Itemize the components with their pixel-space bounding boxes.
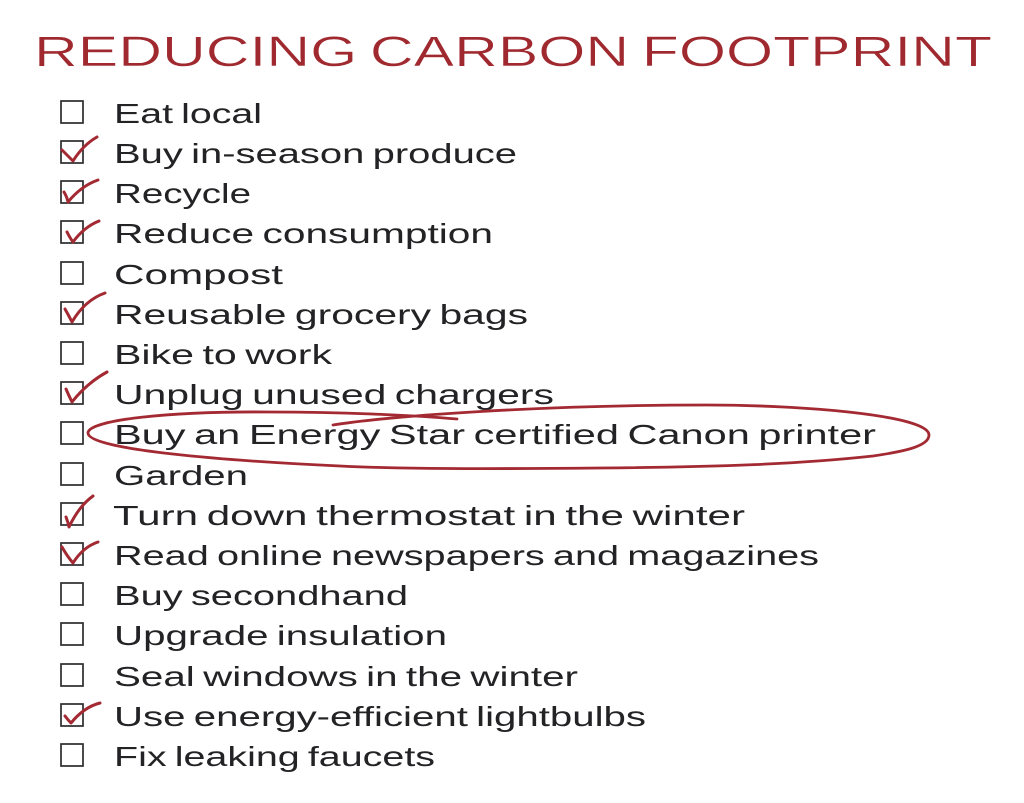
item: Reduce consumption	[61, 218, 493, 249]
item: Eat local	[61, 98, 262, 129]
item: Compost: Compost	[114, 259, 283, 290]
item: Compost	[61, 259, 283, 290]
item: Buy in-season produce: Buy in-season produce	[114, 138, 517, 169]
item: Bike to work: Bike to work	[114, 339, 333, 370]
item: Buy secondhand: Buy secondhand	[114, 580, 408, 611]
title: REDUCING CARBON FOOTPRINT	[34, 28, 992, 76]
item: Reduce consumption: Reduce consumption	[114, 218, 493, 249]
item: Turn down thermostat in the winter: Turn down thermostat in the winter	[113, 500, 745, 531]
item: Read online newspapers and magazines	[61, 540, 819, 571]
item: Turn down thermostat in the winter	[61, 496, 745, 531]
item: Seal windows in the winter	[61, 661, 578, 692]
item: Unplug unused chargers	[61, 372, 554, 410]
item: Fix leaking faucets: Fix leaking faucets	[114, 741, 435, 772]
item: Buy in-season produce	[61, 137, 517, 169]
item: Buy an Energy Star certified Canon printer: Buy an Energy Star certified Canon printer	[114, 419, 876, 450]
item: Recycle	[61, 178, 251, 209]
item: Upgrade insulation: Upgrade insulation	[114, 620, 447, 651]
item: Seal windows in the winter: Seal windows in the winter	[114, 661, 578, 692]
item: Use energy-efficient lightbulbs	[61, 701, 646, 732]
item: Buy secondhand	[61, 580, 408, 611]
item: Bike to work	[61, 339, 333, 370]
item: Read online newspapers and magazines: Read online newspapers and magazines	[114, 540, 819, 571]
item: Buy an Energy Star certified Canon printer	[61, 419, 876, 450]
item: Reusable grocery bags: Reusable grocery bags	[114, 299, 528, 330]
item: Recycle: Recycle	[114, 178, 251, 209]
item: Upgrade insulation	[61, 620, 447, 651]
item: Reusable grocery bags	[61, 293, 528, 330]
item: Use energy-efficient lightbulbs: Use energy-efficient lightbulbs	[114, 701, 646, 732]
item: Eat local: Eat local	[114, 98, 262, 129]
item: Garden	[61, 460, 248, 491]
hand-drawn ellipse around Canon printer item	[88, 405, 929, 469]
checklist	[61, 98, 876, 772]
item: Unplug unused chargers: Unplug unused chargers	[114, 379, 554, 410]
item: Fix leaking faucets	[61, 741, 435, 772]
item: Garden: Garden	[114, 460, 248, 491]
